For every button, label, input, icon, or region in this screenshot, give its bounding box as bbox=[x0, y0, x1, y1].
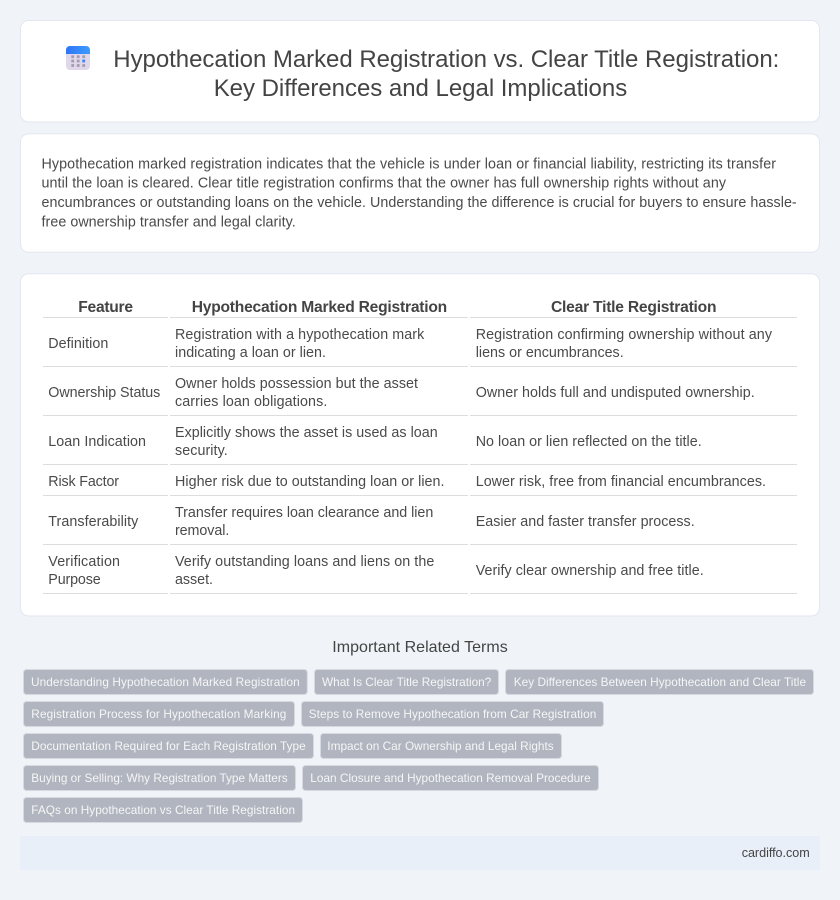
tag: Loan Closure and Hypothecation Removal Procedure bbox=[310, 771, 591, 785]
table row: transferability bbox=[43, 505, 797, 545]
tag: Registration Process for Hypothecation Marking bbox=[31, 707, 286, 721]
table row: risk factor bbox=[43, 474, 797, 496]
text block: introduction paragraph: free ownership transfer and legal clarity. bbox=[42, 214, 296, 230]
title: Hypothecation Marked Registration vs. Clear Title Registration: bbox=[113, 46, 779, 73]
tag: Understanding Hypothecation Marked Registration bbox=[31, 675, 300, 689]
table row: verification purpose: Verify outstanding loans and liens on the bbox=[175, 554, 434, 570]
heading: important related terms: Important Related Terms bbox=[332, 639, 508, 656]
table row: verification purpose: asset. bbox=[175, 572, 213, 588]
tag bbox=[320, 734, 562, 758]
text block: introduction paragraph: until the loan is cleared. Clear title registration confirms that the owner has full ownership rights without any bbox=[42, 176, 727, 192]
table row: verification purpose: Verification bbox=[48, 554, 120, 570]
table row: definition: Definition bbox=[48, 336, 108, 352]
table row: ownership status: Ownership Status bbox=[48, 385, 160, 401]
table row: risk factor: Lower risk, free from financial encumbrances. bbox=[476, 474, 766, 490]
tag bbox=[24, 766, 296, 790]
title bbox=[113, 46, 779, 102]
tag: Steps to Remove Hypothecation from Car Registration bbox=[309, 707, 596, 721]
tag bbox=[506, 670, 814, 694]
tag bbox=[302, 702, 604, 726]
tag: Key Differences Between Hypothecation and Clear Title bbox=[514, 675, 806, 689]
table row: loan indication: No loan or lien reflected on the title. bbox=[476, 434, 702, 450]
table header row: Clear Title Registration bbox=[551, 299, 716, 316]
table row: verification purpose bbox=[43, 554, 797, 594]
table row: verification purpose: Purpose bbox=[48, 572, 101, 588]
text block: introduction paragraph bbox=[42, 156, 797, 230]
table row: ownership status: carries loan obligations. bbox=[175, 394, 327, 410]
table row: definition: liens or encumbrances. bbox=[476, 345, 624, 361]
panel: introduction bbox=[20, 134, 820, 252]
icon: calendar bbox=[66, 46, 90, 70]
tag: Buying or Selling: Why Registration Type Matters bbox=[31, 771, 288, 785]
table row: loan indication: security. bbox=[175, 443, 228, 459]
tag bbox=[314, 670, 498, 694]
table row: loan indication: Explicitly shows the asset is used as loan bbox=[175, 425, 438, 441]
table header row: Feature bbox=[78, 299, 133, 316]
table row: risk factor: Risk Factor bbox=[48, 474, 119, 490]
table row: transferability: Transfer requires loan clearance and lien bbox=[175, 505, 433, 521]
tag bbox=[24, 734, 314, 758]
tag bbox=[302, 766, 598, 790]
tag bbox=[24, 702, 294, 726]
table row: ownership status: Owner holds possession but the asset bbox=[175, 376, 418, 392]
table header row bbox=[43, 299, 797, 318]
title: Key Differences and Legal Implications bbox=[214, 75, 627, 102]
footer source text: cardiffo.com bbox=[742, 846, 810, 860]
panel: related term tags bbox=[24, 670, 814, 822]
panel: comparison table bbox=[20, 274, 820, 616]
table header row: Hypothecation Marked Registration bbox=[192, 299, 447, 316]
table row: transferability: Transferability bbox=[48, 514, 139, 530]
tag: Impact on Car Ownership and Legal Rights bbox=[327, 739, 554, 753]
table row: definition: indicating a loan or lien. bbox=[175, 345, 326, 361]
table row: transferability: Easier and faster transfer process. bbox=[476, 514, 695, 530]
table row: verification purpose: Verify clear ownership and free title. bbox=[476, 563, 704, 579]
tag: What Is Clear Title Registration? bbox=[322, 675, 492, 689]
table row: definition: Registration with a hypothecation mark bbox=[175, 327, 425, 343]
table row: loan indication: Loan Indication bbox=[48, 434, 146, 450]
tag: FAQs on Hypothecation vs Clear Title Registration bbox=[31, 803, 295, 817]
tag: Documentation Required for Each Registration Type bbox=[31, 739, 306, 753]
table row: risk factor: Higher risk due to outstanding loan or lien. bbox=[175, 474, 444, 490]
table row: ownership status: Owner holds full and undisputed ownership. bbox=[476, 385, 755, 401]
tag bbox=[24, 798, 302, 822]
tag bbox=[24, 670, 307, 694]
footer bbox=[20, 836, 820, 870]
text block: introduction paragraph: Hypothecation marked registration indicates that the vehicle is under loan or financial liability, restricting its transfer bbox=[42, 156, 776, 172]
panel: title header bbox=[20, 20, 820, 122]
table row: definition: Registration confirming ownership without any bbox=[476, 327, 773, 343]
text block: introduction paragraph: encumbrances or outstanding loans on the vehicle. Understanding the difference is crucial for buyers to ensure hassle- bbox=[42, 195, 797, 211]
table row: ownership status bbox=[43, 376, 797, 416]
table row: loan indication bbox=[43, 425, 797, 465]
table row: definition bbox=[43, 327, 797, 367]
table row: transferability: removal. bbox=[175, 523, 229, 539]
